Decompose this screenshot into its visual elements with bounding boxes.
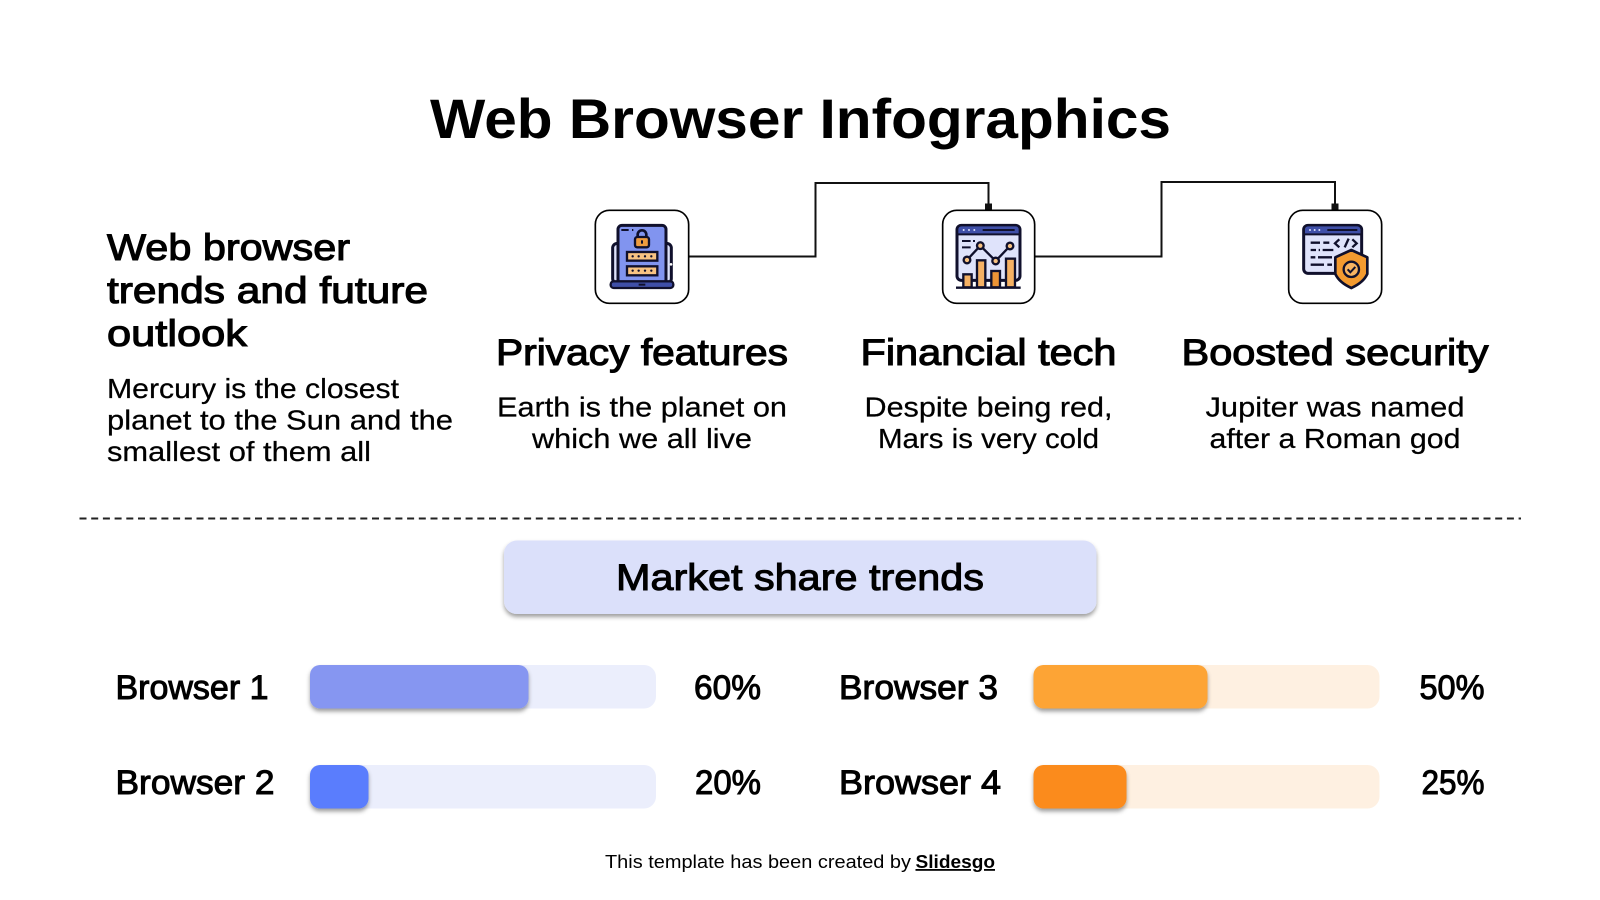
- left heading: outlook: [107, 313, 248, 354]
- left heading: [107, 227, 428, 354]
- left paragraph: planet to the Sun and the: [107, 404, 453, 436]
- section header: market share trends: Market share trends: [616, 557, 984, 598]
- section header: market share trends: [504, 540, 1096, 614]
- footer credit: Slidesgo: [916, 852, 995, 872]
- bar: browser 2: [116, 764, 761, 808]
- feature: boosted security: after a Roman god: [1210, 423, 1460, 454]
- feature: financial tech: Mars is very cold: [878, 423, 1099, 454]
- feature: financial tech: Financial tech: [860, 332, 1116, 373]
- bar: browser 3: Browser 3: [839, 669, 998, 707]
- left heading: Web browser: [107, 227, 350, 268]
- feature: financial tech: Despite being red,: [864, 392, 1112, 422]
- left paragraph: smallest of them all: [107, 436, 371, 467]
- feature: privacy features: [496, 332, 788, 454]
- bar: browser 4: [839, 764, 1484, 808]
- bar: browser 2: Browser 2: [116, 764, 274, 802]
- icon: code window with shield: [1289, 210, 1382, 303]
- bar: browser 1: Browser 1: [116, 669, 268, 707]
- connector: privacy to financial: [689, 183, 992, 256]
- icon: laptop with lock: [595, 210, 689, 303]
- feature: boosted security: Boosted security: [1182, 332, 1489, 373]
- bar: browser 3: [839, 665, 1484, 708]
- bar: browser 4: Browser 4: [839, 764, 1001, 802]
- feature: privacy features: Earth is the planet on: [497, 392, 787, 422]
- feature: boosted security: [1182, 332, 1489, 454]
- connector: financial to security: [1035, 182, 1338, 256]
- left heading: trends and future: [107, 270, 428, 311]
- title: Web Browser Infographics: [430, 87, 1171, 150]
- feature: privacy features: which we all live: [531, 423, 752, 454]
- bar: browser 4: 25%: [1422, 764, 1484, 802]
- icon: browser chart: [943, 210, 1035, 303]
- left paragraph: [107, 373, 453, 467]
- bar: browser 2: 20%: [695, 764, 761, 802]
- bar: browser 3: 50%: [1420, 669, 1484, 707]
- bar: browser 1: 60%: [694, 669, 761, 707]
- left paragraph: Mercury is the closest: [107, 373, 399, 404]
- footer credit: This template has been created by: [605, 852, 911, 872]
- feature: boosted security: Jupiter was named: [1206, 392, 1464, 422]
- bar: browser 1: [116, 665, 761, 708]
- feature: financial tech: [860, 332, 1116, 454]
- feature: privacy features: Privacy features: [496, 332, 788, 373]
